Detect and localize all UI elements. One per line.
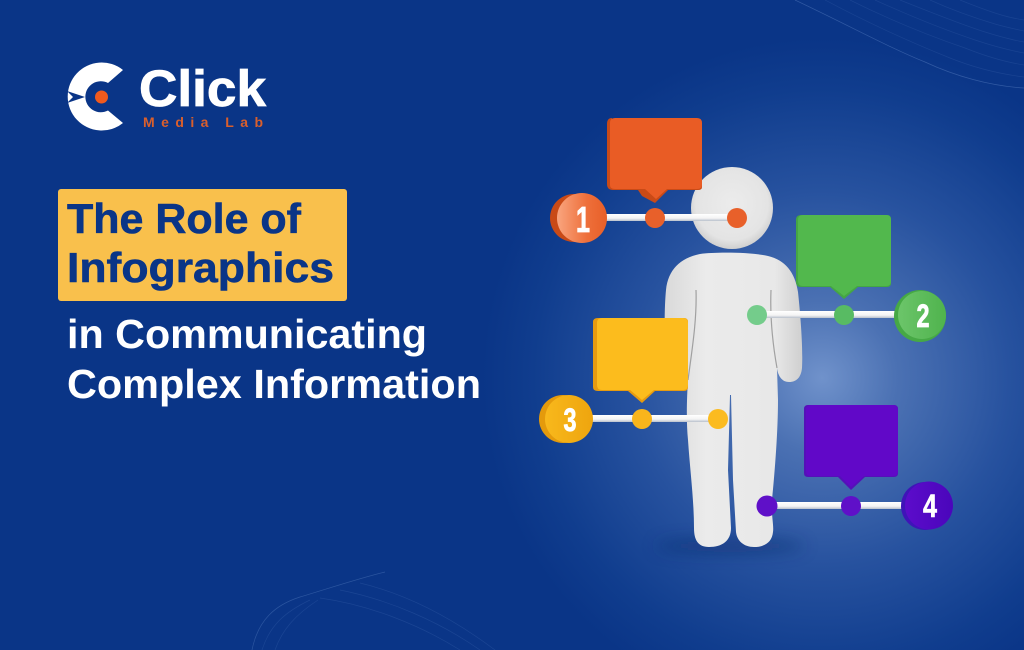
dots 3 <box>632 409 652 429</box>
figure body <box>665 253 802 547</box>
title: The Role of <box>67 195 302 242</box>
callout 2: green: 2 <box>916 298 930 334</box>
title highlight box <box>58 189 347 301</box>
number badge 1 <box>550 194 598 242</box>
illustration <box>539 118 953 553</box>
connector 1 <box>605 214 735 221</box>
callout 2: green <box>747 215 946 342</box>
title: Complex Information <box>67 361 481 407</box>
callout 1: orange: 1 <box>576 199 590 240</box>
icon: logo C mark <box>67 63 123 131</box>
callout 4: purple <box>756 405 953 530</box>
callout 3: yellow <box>539 318 728 443</box>
connector 4 <box>768 502 904 509</box>
figure shadow <box>655 539 805 553</box>
number badge 4 <box>901 482 949 530</box>
number badge 3 <box>539 395 587 443</box>
logo tagline: Media Lab <box>143 114 263 130</box>
callout 4: purple: 4 <box>923 488 937 524</box>
dots 4 <box>841 496 861 516</box>
title <box>67 195 481 407</box>
bubble 1 <box>607 118 702 203</box>
callout 1: orange <box>550 118 747 243</box>
dots 1 <box>645 208 665 228</box>
logo wordmark: Click <box>139 60 267 117</box>
bubble 3 <box>593 318 688 403</box>
bubble 4 <box>804 405 898 490</box>
bubble 2 <box>796 215 891 299</box>
figure head <box>691 167 773 249</box>
human figure <box>665 167 802 547</box>
connector 3 <box>590 415 718 422</box>
number badge 2 <box>894 290 946 342</box>
logo <box>67 60 267 130</box>
title: Infographics <box>67 244 334 291</box>
dots 2 <box>834 305 854 325</box>
connector 2 <box>755 311 900 318</box>
title: in Communicating <box>67 311 427 357</box>
callout 3: yellow: 3 <box>564 402 576 438</box>
